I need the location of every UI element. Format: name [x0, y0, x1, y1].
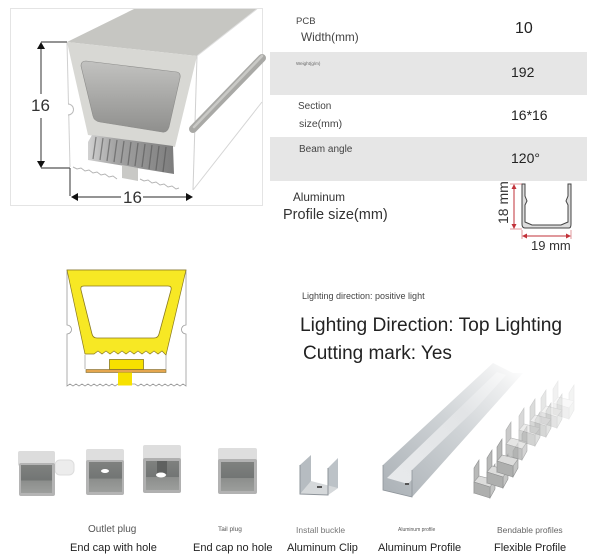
wavy base line	[73, 167, 179, 189]
heading: cutting mark: Cutting mark: Yes	[303, 343, 452, 364]
spec label: weight: Weight(g/m)	[296, 61, 320, 66]
dimension label: 18 mm: 18 mm	[495, 181, 511, 224]
end cap with side outlet	[18, 451, 74, 496]
table row background: beam angle	[270, 137, 587, 181]
side groove	[193, 58, 262, 129]
label: flexible profile: Flexible Profile	[494, 542, 566, 554]
dimension label: 19 mm: 19 mm	[531, 238, 571, 253]
flexible profile	[474, 381, 574, 498]
PCB stem	[122, 165, 138, 181]
caption: install buckle: Install buckle	[296, 525, 345, 535]
spec label: size: size(mm)	[299, 118, 342, 130]
spec value: section size: 16*16	[511, 107, 548, 123]
end cap with slot hole	[143, 445, 181, 493]
spec value: beam angle: 120°	[511, 150, 540, 166]
dimension label: height 16: 16	[31, 96, 50, 115]
front face	[67, 42, 197, 147]
end cap no hole	[218, 448, 257, 494]
front outline	[67, 42, 70, 167]
caption: outlet plug: Outlet plug	[88, 524, 136, 535]
caption: bendable profiles: Bendable profiles	[497, 525, 563, 535]
aluminum profile	[383, 363, 523, 497]
top face	[67, 9, 257, 56]
aluminum clip	[300, 455, 338, 495]
spec label: aluminum: Aluminum	[293, 191, 345, 204]
label: aluminum profile: Aluminum Profile	[378, 542, 461, 554]
cutting notch	[68, 104, 74, 115]
panel: profile dimension drawing	[10, 8, 266, 206]
spec label: section: Section	[298, 101, 331, 112]
label: aluminum clip: Aluminum Clip	[287, 542, 358, 554]
spec value: width: 10	[515, 20, 533, 37]
spec label: profile size: Profile size(mm)	[283, 207, 388, 223]
spec value: weight: 192	[511, 64, 534, 80]
dimension label: width 16: 16	[123, 188, 142, 207]
end cap with top hole	[86, 449, 124, 495]
caption: lighting direction: Lighting direction: positive light	[302, 291, 425, 301]
height dimension	[41, 42, 188, 197]
label: end cap no hole: End cap no hole	[193, 542, 273, 554]
heading: lighting direction: Lighting Direction: Top Lighting	[300, 315, 562, 336]
LED slot	[88, 135, 174, 174]
spec label: PCB: PCB	[296, 16, 316, 27]
spec label: beam angle: Beam angle	[299, 144, 352, 155]
label: end cap with hole: End cap with hole	[70, 542, 157, 554]
spec label: width: Width(mm)	[301, 30, 359, 44]
table row background: weight	[270, 52, 587, 95]
caption: tail plug: Tail plug	[218, 526, 242, 533]
light window	[81, 61, 180, 132]
caption: aluminum profile: Aluminum profile	[398, 527, 435, 533]
